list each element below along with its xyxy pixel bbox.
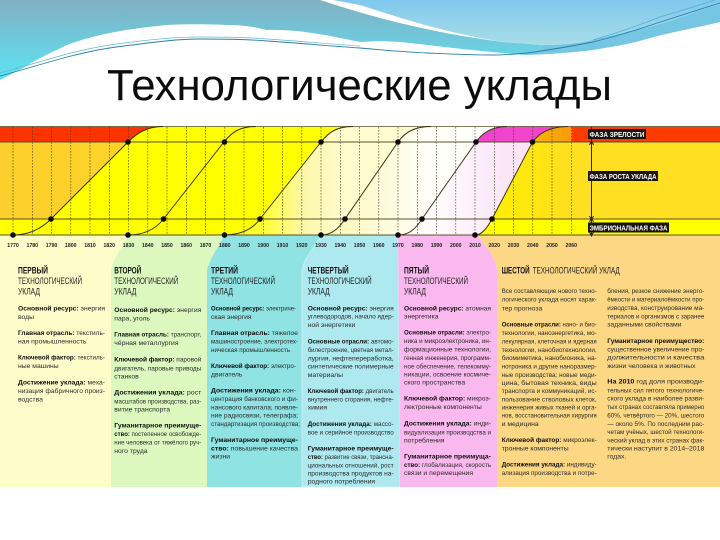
text: second mode facts: Ключевой фактор: паровой — [114, 356, 201, 364]
year axis: 2050 — [546, 243, 558, 249]
text: sixth mode left column: инженерия живых тканей и орга- — [502, 404, 597, 412]
text: fourth mode facts: внутреннего сгорания, нефте- — [308, 396, 394, 403]
heading: fifth — [404, 264, 468, 296]
heading: fourth: ТЕХНОЛОГИЧЕСКИЙ — [308, 275, 372, 286]
text: third mode facts: нансового капитала; появле- — [211, 404, 298, 411]
text: third mode facts: машиностроение, электротех- — [211, 339, 298, 346]
text: sixth mode right column: четам учёных, шестой технологи- — [607, 428, 704, 436]
heading: first: ТЕХНОЛОГИЧЕСКИЙ — [18, 275, 82, 286]
heading: third: ТРЕТИЙ — [211, 264, 238, 276]
year axis: 1830 — [123, 243, 134, 249]
text: sixth mode right column: ского уклада в наиболее разви- — [607, 395, 704, 403]
text: sixth mode right column: существенное увеличение про- — [607, 346, 704, 353]
text: fifth mode facts: Основной ресурс: атомная — [404, 304, 491, 312]
text: first mode facts: ная промышленность — [18, 339, 87, 346]
text: fourth mode facts: ство: развитие связи, трансна- — [308, 454, 394, 461]
text: sixth mode left column: пользование стволовых клеток, — [502, 396, 597, 403]
text: sixth mode left column: тер прогноза — [502, 305, 542, 312]
year axis: 1980 — [412, 243, 423, 249]
year axis: 1870 — [200, 243, 211, 249]
text: third mode facts: жизни — [211, 454, 230, 461]
text: second mode facts: Гуманитарное преимуще- — [114, 422, 201, 429]
heading: second: УКЛАД — [114, 286, 136, 296]
year axis: 2060 — [566, 243, 577, 249]
text: fifth mode facts: Основные отрасли: электро- — [404, 330, 491, 337]
year axis: 1970 — [392, 243, 404, 249]
text: sixth mode right column: должительности и качества — [607, 355, 705, 362]
year axis: 1820 — [104, 243, 115, 249]
text: sixth mode left column: технологии, нанобиотехнологии, — [502, 346, 597, 354]
year axis: 2020 — [489, 243, 500, 249]
year axis — [7, 243, 577, 249]
text: fourth mode facts: Основные отрасли: автомо- — [308, 338, 394, 345]
heading: fourth — [308, 264, 372, 296]
text: third mode facts: Достижения уклада: кон- — [211, 387, 296, 394]
text: fifth mode facts: связи и перемещения — [404, 470, 473, 477]
text: fourth mode facts: химия — [308, 405, 327, 412]
text: fourth mode facts: ной энергетики — [308, 321, 355, 329]
text: second mode facts: Главная отрасль: транспорт, — [114, 332, 201, 339]
phase axis — [590, 127, 594, 236]
text: third mode facts: центрация банковского и фи- — [211, 395, 298, 403]
text: fifth mode facts: Достижения уклада: инди- — [404, 420, 491, 427]
text: third mode facts: Главная отрасль: тяжелое — [211, 330, 298, 337]
heading: sixth: ТЕХНОЛОГИЧЕСКИЙ УКЛАД — [533, 264, 620, 276]
text: fourth mode facts: производства продуктов на- — [308, 471, 394, 478]
text: sixth mode right column: годах. — [607, 454, 626, 461]
text: fifth mode facts: ника и микроэлектроника, ин- — [404, 338, 491, 345]
text: first mode facts: Достижение уклада: меха- — [18, 379, 105, 386]
panel: fifth mode background — [398, 235, 497, 487]
year axis: 2010 — [469, 243, 481, 249]
heading: sixth: ШЕСТОЙ — [502, 264, 530, 276]
text: fifth mode facts: ное обеспечение, телекомму- — [404, 362, 491, 370]
text: fifth mode facts — [404, 304, 491, 477]
heading: fifth: УКЛАД — [404, 286, 426, 296]
year axis: 1990 — [431, 243, 442, 249]
text: fifth mode facts: видуализация производства и — [404, 429, 491, 436]
heading: third — [211, 264, 275, 296]
year axis: 1770 — [7, 243, 19, 249]
text: fourth mode facts: Гуманитарное преимуще- — [308, 445, 394, 452]
heading: first: УКЛАД — [18, 286, 40, 296]
panel: third mode background — [207, 235, 321, 487]
text: fifth mode facts: формационные технологии, — [404, 347, 491, 354]
column: first technological mode — [18, 264, 105, 404]
text: sixth mode right column: тически наступит в 2014–2018 — [607, 446, 705, 453]
text: sixth mode left column: биомиметика, нанобионика, на- — [502, 354, 597, 362]
year axis: 1940 — [335, 243, 346, 249]
year axis: 2000 — [450, 243, 462, 249]
text: second mode facts: двигатель, паровые приводы — [114, 365, 201, 372]
heading: second — [114, 264, 178, 296]
text: sixth mode right column: тельных сил пятого технологиче- — [607, 387, 704, 394]
phase labels: ФАЗА РОСТА УКЛАДА — [590, 172, 657, 181]
text: second mode facts: пара, уголь — [114, 316, 150, 323]
text: fourth mode facts: Достижения уклада: массо- — [308, 421, 394, 428]
year axis: 1890 — [238, 243, 250, 249]
year axis: 1780 — [27, 243, 38, 249]
text: fifth mode facts: ского пространства — [404, 380, 465, 387]
text: fourth mode facts: билестроение, цветная метал- — [308, 346, 394, 354]
text: sixth mode right column: териалов и организмов с заранее — [607, 313, 704, 320]
text: first mode facts: Главная отрасль: текстиль- — [18, 330, 105, 337]
text: fifth mode facts: энергетика — [404, 314, 439, 321]
text: third mode facts: Основной ресурс: электриче- — [211, 304, 296, 312]
year axis: 1800 — [65, 243, 77, 249]
text: fourth mode facts — [308, 304, 394, 486]
text: fourth mode facts: углеводородов, начало ядер- — [308, 314, 394, 321]
text: sixth mode right column: — около 5%. По последним рас- — [607, 421, 704, 428]
text: sixth mode left column: Все составляющие нового техно- — [502, 288, 597, 295]
text: fifth mode facts: Гуманитарное преимуща- — [404, 453, 491, 460]
text: sixth mode left column: ализация производства и потре- — [502, 470, 597, 477]
year axis: 1910 — [277, 243, 288, 249]
text: first mode facts: ные машины — [18, 363, 59, 370]
text: sixth mode left column: технологии, наноэнергетика, мо- — [502, 330, 597, 337]
text: fourth mode facts: родного потребления — [308, 478, 375, 486]
year axis: 1950 — [354, 243, 365, 249]
year axis: 1930 — [315, 243, 327, 249]
text: sixth mode left column: лекулярная, клеточная и ядерная — [502, 338, 597, 345]
year axis: 1860 — [181, 243, 192, 249]
heading: third: УКЛАД — [211, 286, 233, 296]
heading: sixth — [502, 264, 620, 276]
text: fifth mode facts: ство: глобализация, скорость — [404, 461, 491, 469]
heading: fourth: УКЛАД — [308, 286, 330, 296]
text: sixth mode right column: 60%, четвёртого — 20%, шестого — [607, 412, 704, 419]
text: third mode facts: Ключевой фактор: электро- — [211, 362, 296, 370]
text: sixth mode right column: ёмкости и материалоёмкости про- — [607, 297, 704, 304]
year axis: 1850 — [161, 243, 173, 249]
heading: fourth: ЧЕТВЕРТЫЙ — [308, 264, 349, 276]
heading: first: ПЕРВЫЙ — [18, 264, 48, 276]
year axis: 1960 — [373, 243, 385, 249]
year axis: 2040 — [527, 243, 539, 249]
text: fifth mode facts: генная инженерия, программ- — [404, 355, 491, 362]
text: fourth mode facts: синтетические полимерные — [308, 364, 394, 371]
text: first mode facts: водства — [18, 397, 43, 404]
text: fifth mode facts: лектронные компоненты — [404, 404, 482, 411]
text: sixth mode left column: логического уклада носят харак- — [502, 297, 597, 304]
text: second mode facts: ство: постепенное освобожде- — [114, 430, 201, 438]
text: second mode facts: Основной ресурс: энергия — [114, 306, 202, 314]
decorative wave header — [0, 0, 720, 80]
panel: fourth mode background — [302, 235, 400, 487]
text: sixth mode left column: Основные отрасли: нано- и био- — [502, 320, 597, 328]
text: sixth mode left column: тронные компоненты — [502, 445, 569, 452]
phase labels — [588, 129, 669, 232]
text: sixth mode left column: Ключевой фактор: микроэлек- — [502, 436, 597, 444]
text: sixth mode right column: жизни человека и животных — [607, 363, 696, 370]
text: fourth mode facts: циональных отношений, рост — [308, 461, 394, 469]
S-curves — [13, 126, 568, 235]
text: sixth mode left column: и медицина — [502, 421, 539, 428]
text: second mode facts: ние человека от тяжёлого руч- — [114, 439, 201, 446]
heading: fifth: ТЕХНОЛОГИЧЕСКИЙ — [404, 275, 468, 286]
column: third technological mode — [211, 264, 300, 461]
panel: sixth mode background — [477, 235, 720, 487]
text: sixth mode left column: нотроника и другие наноразмер- — [502, 364, 597, 371]
text: third mode facts: ство: повышение качества — [211, 445, 298, 452]
text: sixth mode right column — [607, 287, 705, 461]
text: second mode facts: масштабов производства, раз- — [114, 397, 201, 405]
text: sixth mode right column: тых странах составляла примерно — [607, 404, 704, 411]
text: sixth mode left column — [502, 288, 597, 477]
year axis: 1840 — [142, 243, 154, 249]
text: first mode facts: воды — [18, 314, 34, 321]
text: third mode facts: стандартизация производства; — [211, 421, 300, 428]
text: second mode facts — [114, 306, 202, 455]
text: second mode facts: чёрная металлургия — [114, 340, 179, 347]
text: sixth mode left column: цина, бытовая техника, виды — [502, 379, 597, 387]
year axis: 2030 — [508, 243, 519, 249]
text: second mode facts: станков — [114, 374, 139, 381]
phase labels: ФАЗА ЗРЕЛОСТИ — [590, 130, 644, 139]
text: second mode facts: ного труда — [114, 448, 148, 455]
text: sixth mode right column: изводства, конструирование ма- — [607, 305, 704, 312]
chart: S-curves of technological modes — [0, 126, 720, 238]
heading: second: ТЕХНОЛОГИЧЕСКИЙ — [114, 275, 178, 286]
text: second mode facts: витие транспорта — [114, 407, 170, 414]
column: sixth technological mode — [502, 264, 705, 477]
text: fifth mode facts: Ключевой фактор: микроэ- — [404, 395, 491, 403]
text: third mode facts: ническая промышленность — [211, 347, 290, 354]
text: fourth mode facts: материалы — [308, 372, 343, 379]
text: second mode facts: Достижения уклада: рост — [114, 390, 201, 397]
text: sixth mode left column: Достижения уклада: индивиду- — [502, 461, 597, 468]
text: first mode facts: низация фабричного произ- — [18, 387, 105, 395]
curve points — [10, 139, 535, 238]
text: fourth mode facts: вое и серийное производство — [308, 428, 394, 436]
heading: second: ВТОРОЙ — [114, 264, 141, 276]
year axis: 1790 — [46, 243, 57, 249]
text: sixth mode right column: заданными свойствами — [607, 321, 682, 329]
phase labels: ЭМБРИОНАЛЬНАЯ ФАЗА — [590, 224, 668, 232]
text: fourth mode facts: Ключевой фактор: двигатель — [308, 387, 394, 395]
text: sixth mode right column: На 2010 год доля производи- — [607, 379, 704, 386]
heading: fifth: ПЯТЫЙ — [404, 264, 429, 276]
text: sixth mode right column: ческий уклад в этих странах фак- — [607, 436, 704, 444]
title: Технологические уклады — [107, 61, 612, 110]
heading: third: ТЕХНОЛОГИЧЕСКИЙ — [211, 275, 275, 286]
text: fourth mode facts: лургия, нефтепереработка, — [308, 354, 394, 362]
text: third mode facts — [211, 304, 300, 461]
column: fifth technological mode — [404, 264, 491, 477]
text: fourth mode facts: Основной ресурс: энергия — [308, 304, 394, 312]
heading: first — [18, 264, 82, 296]
year axis: 1810 — [84, 243, 96, 249]
text: sixth mode right column: бления, резкое снижение энерго- — [607, 287, 704, 295]
text: third mode facts: Гуманитарное преимуще- — [211, 437, 298, 444]
text: third mode facts: ская энергия — [211, 314, 252, 321]
text: first mode facts: Основной ресурс: энергия — [18, 304, 105, 312]
text: sixth mode left column: нов, восстановительная хирургия — [502, 413, 597, 420]
year axis: 1900 — [258, 243, 269, 249]
text: fifth mode facts: потребления — [404, 436, 445, 444]
chart background bands — [0, 126, 720, 236]
text: sixth mode left column: транспорта и коммуникаций, ис- — [502, 387, 597, 395]
column: second technological mode — [114, 264, 202, 455]
text: sixth mode right column: Гуманитарное преимущество: — [607, 338, 704, 345]
text: first mode facts: Ключевой фактор: текстиль- — [18, 354, 105, 362]
text: third mode facts: ние радиосвязи, телеграфа; — [211, 413, 298, 420]
text: first mode facts — [18, 304, 105, 404]
text: fifth mode facts: никации, освоение космиче- — [404, 372, 491, 379]
panel: first mode background — [0, 235, 128, 487]
column: fourth technological mode — [308, 264, 394, 486]
text: sixth mode left column: ные производства; новые меди- — [502, 372, 597, 379]
text: third mode facts: двигатель — [211, 371, 243, 378]
panel: second mode background — [111, 235, 224, 487]
year axis: 1920 — [296, 243, 308, 249]
year axis: 1880 — [219, 243, 231, 249]
